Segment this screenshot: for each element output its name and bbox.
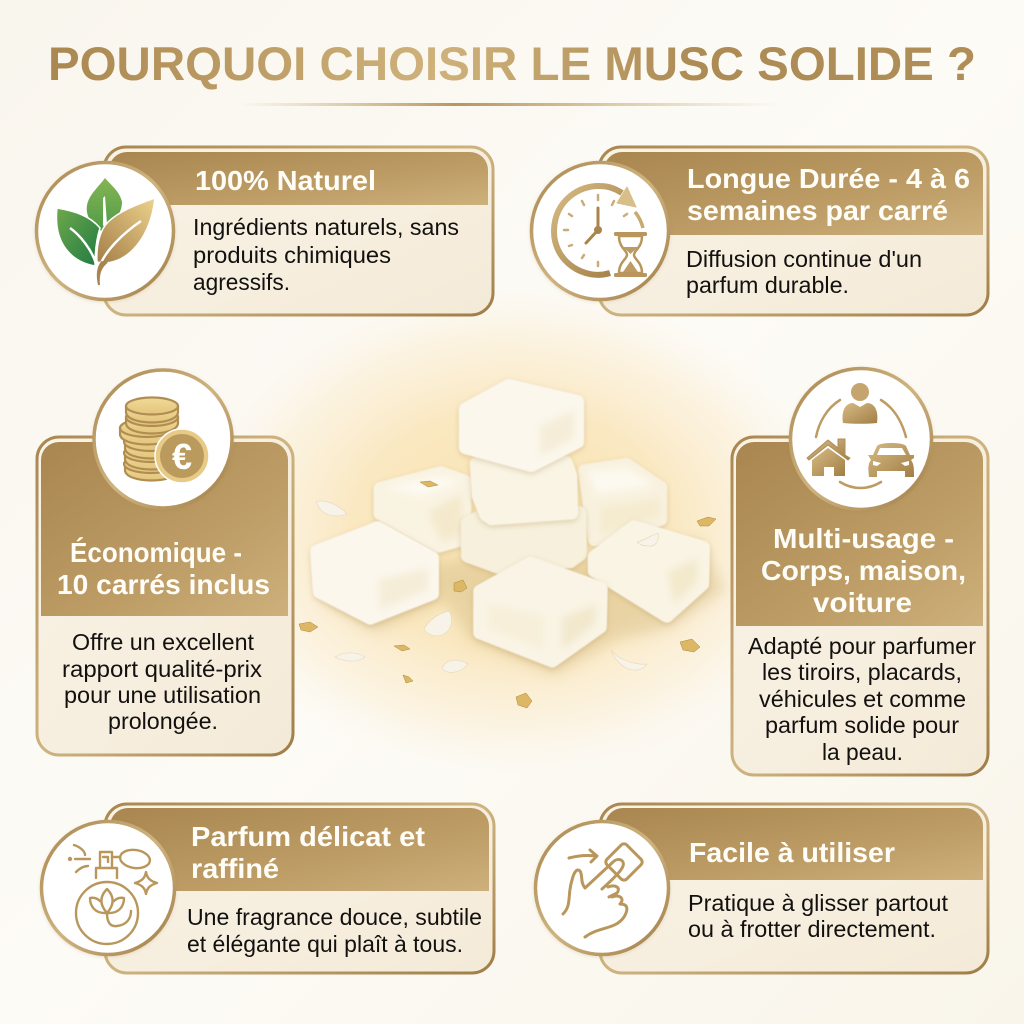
icon: person, house, car: [790, 368, 932, 510]
cube: right front: [594, 527, 703, 616]
text block: la peau.: [822, 739, 903, 765]
text block: véhicules et comme: [759, 686, 966, 712]
text block: [193, 214, 459, 295]
cube: left back: [380, 473, 465, 546]
text block: rapport qualité-prix: [62, 656, 263, 682]
cube: stack bottom: [468, 513, 580, 567]
heading: Longue Durée - 4 à 6: [687, 163, 970, 194]
icon: euro coins: [94, 370, 232, 508]
text block: [748, 633, 976, 765]
text block: et élégante qui plaît à tous.: [187, 931, 463, 957]
text block: [688, 890, 949, 942]
heading: Parfum délicat et: [191, 821, 425, 852]
text block: parfum solide pour: [765, 712, 959, 738]
heading: [191, 821, 425, 884]
central image: solid musk squares: [299, 386, 725, 708]
panel: 100% Naturel: [36, 147, 493, 315]
icon: perfume bottle: [42, 822, 174, 954]
gold flakes: [299, 481, 716, 708]
heading: voiture: [813, 587, 912, 618]
cube: right back: [584, 464, 661, 540]
icon: clock and hourglass: [532, 162, 668, 300]
text block: les tiroirs, placards,: [762, 659, 962, 685]
text block: Ingrédients naturels, sans: [193, 214, 459, 240]
panel: Parfum délicat: [42, 804, 494, 973]
heading: Économique -: [70, 537, 242, 568]
icon: hand with square: [536, 822, 668, 954]
text block: ou à frotter directement.: [688, 916, 936, 942]
text block: Offre un excellent: [72, 629, 255, 655]
text block: [187, 904, 482, 957]
heading: [57, 537, 270, 600]
text block: Diffusion continue d'un: [686, 246, 922, 272]
text block: parfum durable.: [686, 272, 849, 298]
title: POURQUOI CHOISIR LE MUSC SOLIDE ?: [48, 37, 976, 90]
heading: [761, 523, 966, 618]
text block: Une fragrance douce, subtile: [187, 904, 482, 930]
cube: front left: [317, 528, 432, 618]
heading: raffiné: [191, 853, 279, 884]
panel: Facile à utiliser: [536, 804, 988, 973]
panel: Économique: [37, 370, 293, 755]
heading: 10 carrés inclus: [57, 569, 270, 600]
panel: Longue Durée: [532, 147, 988, 315]
cube: stack top: [466, 386, 577, 465]
text block: [686, 246, 922, 298]
text block: Adapté pour parfumer: [748, 633, 976, 659]
icon: leaves: [36, 162, 174, 300]
text block: prolongée.: [108, 708, 218, 734]
petals: [316, 501, 658, 672]
heading: Corps, maison,: [761, 555, 966, 586]
heading: 100% Naturel: [195, 165, 376, 196]
panel: Multi-usage: [732, 368, 988, 775]
cube: stack middle: [476, 462, 572, 518]
heading: [687, 163, 970, 226]
cube: front centre: [480, 563, 601, 661]
icon: euro coins: €: [172, 436, 192, 477]
title underline: [240, 103, 780, 106]
heading: Facile à utiliser: [689, 837, 895, 868]
text block: Pratique à glisser partout: [688, 890, 949, 916]
text block: [62, 629, 263, 734]
text block: pour une utilisation: [64, 682, 261, 708]
text block: produits chimiques: [193, 242, 391, 268]
text block: agressifs.: [193, 269, 290, 295]
heading: semaines par carré: [687, 195, 948, 226]
heading: Multi-usage -: [773, 523, 954, 554]
